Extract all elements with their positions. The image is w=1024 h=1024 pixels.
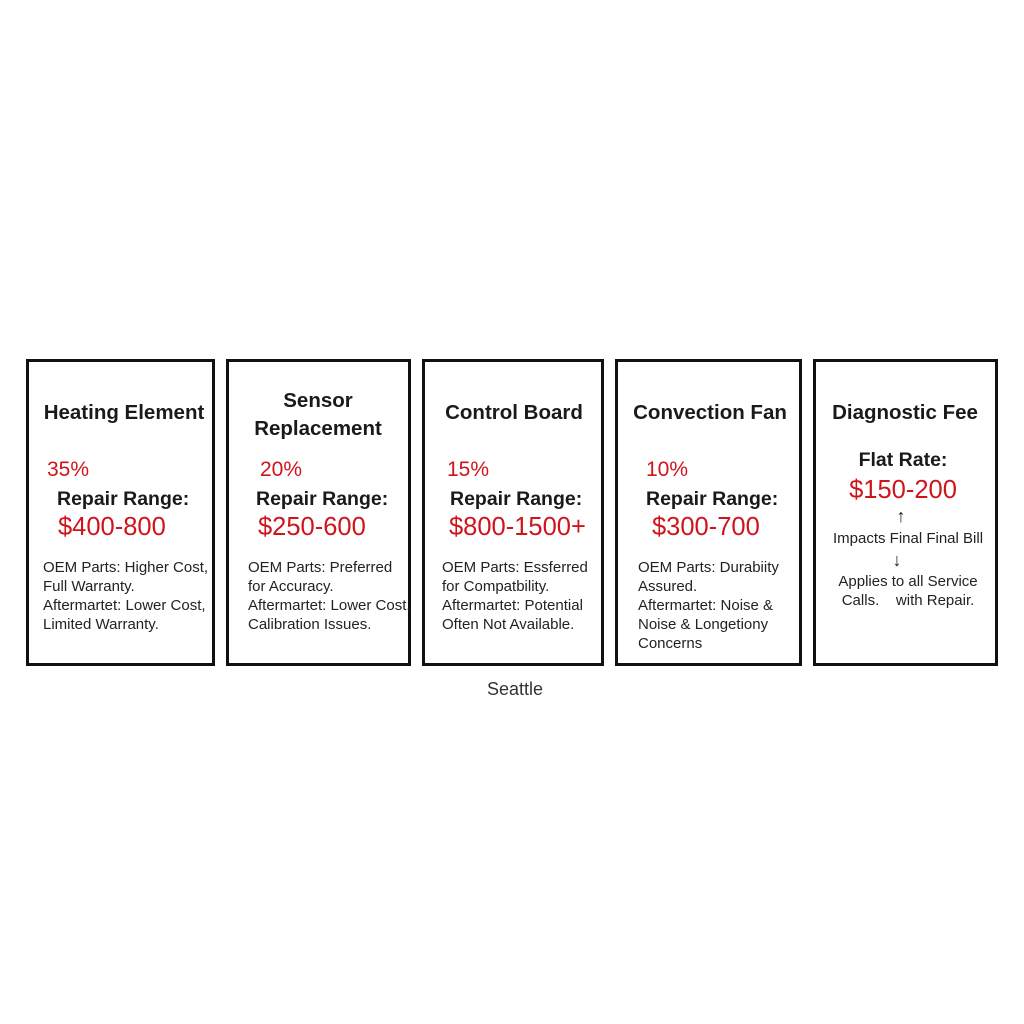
repair range label: Repair Range:	[57, 488, 189, 510]
flat rate label: Flat Rate:	[859, 449, 947, 471]
price: $400-800: $400-800	[58, 513, 166, 541]
body text: Aftermartet: Lower Cost,	[43, 597, 206, 614]
repair range label: Repair Range:	[646, 488, 778, 510]
heading: sensor replacement: Sensor	[283, 389, 353, 412]
body text: Often Not Available.	[442, 616, 574, 633]
applies text	[838, 573, 978, 609]
body text: Aftermartet: Noise &	[638, 597, 773, 614]
panel: control board	[422, 359, 604, 666]
body text: Full Warranty.	[43, 578, 135, 595]
body text: Aftermartet: Lower Cost.	[248, 597, 411, 614]
body text: Aftermartet: Potential	[442, 597, 583, 614]
panel: sensor replacement	[226, 359, 411, 666]
panel: diagnostic fee	[813, 359, 998, 666]
body text: OEM Parts: Durabiity	[638, 559, 779, 576]
caption: Seattle: Seattle	[487, 679, 543, 699]
body text: OEM Parts: Preferred	[248, 559, 392, 576]
heading: convection fan: Convection Fan	[633, 401, 787, 424]
price: $800-1500+: $800-1500+	[449, 513, 586, 541]
body text	[43, 559, 208, 633]
body text	[638, 559, 779, 652]
body text: Assured.	[638, 578, 697, 595]
arrow up: ↑	[896, 506, 906, 526]
heading: heating element: Heating Element	[44, 401, 204, 424]
repair range label: Repair Range:	[450, 488, 582, 510]
body text	[248, 559, 411, 633]
body text: Calibration Issues.	[248, 616, 371, 633]
impacts text: Impacts Final Final Bill	[833, 530, 983, 547]
price: $250-600: $250-600	[258, 513, 366, 541]
body text: Noise & Longetiony	[638, 616, 768, 633]
body text: Concerns	[638, 635, 702, 652]
body text	[442, 559, 588, 633]
panel: heating element	[26, 359, 215, 666]
percent: 35%: 35%	[47, 458, 89, 481]
body text: OEM Parts: Higher Cost,	[43, 559, 208, 576]
panel: convection fan	[615, 359, 802, 666]
heading: sensor replacement	[254, 389, 382, 440]
arrow down: ↓	[892, 550, 902, 570]
price: $300-700: $300-700	[652, 513, 760, 541]
repair range label: Repair Range:	[256, 488, 388, 510]
heading: diagnostic fee: Diagnostic Fee	[832, 401, 978, 424]
body text: OEM Parts: Essferred	[442, 559, 588, 576]
applies text: Applies to all Service	[838, 573, 978, 590]
heading: control board: Control Board	[445, 401, 583, 424]
heading: sensor replacement: Replacement	[254, 417, 382, 440]
percent: 20%: 20%	[260, 458, 302, 481]
body text: Limited Warranty.	[43, 616, 159, 633]
percent: 15%: 15%	[447, 458, 489, 481]
percent: 10%: 10%	[646, 458, 688, 481]
applies text: Calls. with Repair.	[842, 592, 974, 609]
body text: for Accuracy.	[248, 578, 334, 595]
body text: for Compatbility.	[442, 578, 549, 595]
price: $150-200: $150-200	[849, 476, 957, 504]
